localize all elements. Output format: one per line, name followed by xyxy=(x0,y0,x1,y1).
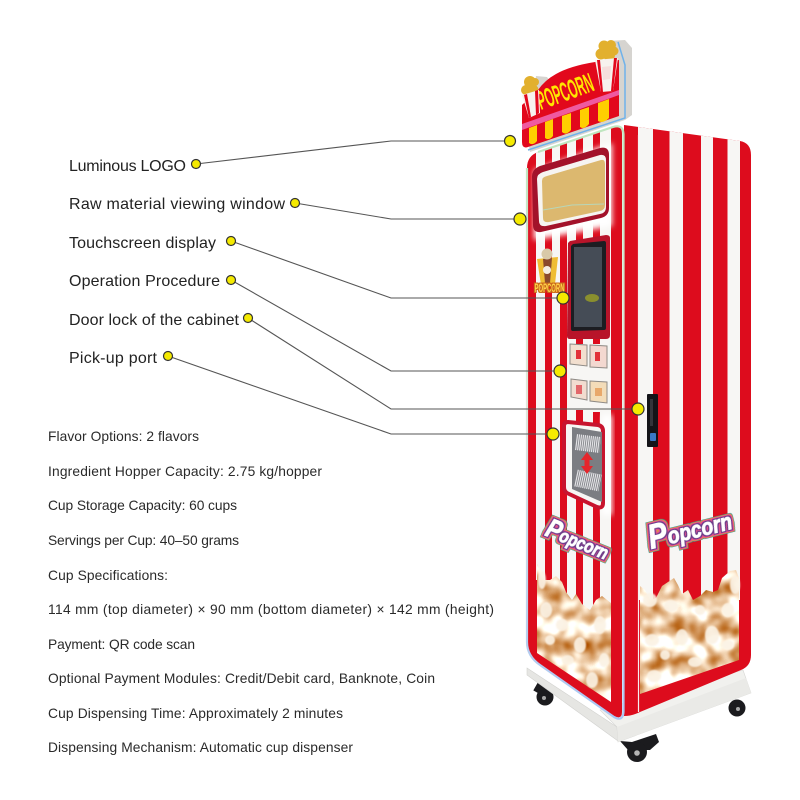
operation procedure panel xyxy=(567,339,610,421)
left popcorn cup xyxy=(521,76,540,118)
vending machine: POPCORN xyxy=(534,281,564,295)
luminous popcorn sign xyxy=(521,40,632,152)
leader line: touchscreen xyxy=(226,236,569,304)
specifications list: Ingredient Hopper Capacity: 2.75 kg/hopper xyxy=(48,464,322,479)
specifications list: Cup Dispensing Time: Approximately 2 minutes xyxy=(48,706,343,721)
caster wheels xyxy=(533,682,746,762)
component labels: Door lock of the cabinet xyxy=(69,312,240,329)
white base platform xyxy=(527,668,751,742)
blue rim light xyxy=(528,42,625,150)
component labels: Operation Procedure xyxy=(69,273,220,290)
ambient LED trim xyxy=(527,126,624,719)
specifications list: Cup Storage Capacity: 60 cups xyxy=(48,498,237,513)
component labels: Raw material viewing window xyxy=(69,196,285,213)
sign face xyxy=(522,60,619,147)
specifications list: Cup Specifications: xyxy=(48,568,168,583)
popcorn script logo, side: Popcorn xyxy=(644,499,735,557)
right popcorn cup xyxy=(595,40,618,92)
specifications list: 114 mm (top diameter) × 90 mm (bottom diameter) × 142 mm (height) xyxy=(48,602,494,617)
dispensing vents xyxy=(576,442,600,483)
component labels: Touchscreen display xyxy=(69,235,216,252)
front popcorn artwork xyxy=(537,564,611,702)
red arrow icon xyxy=(581,452,593,474)
component labels: Pick-up port xyxy=(69,350,158,367)
cabinet side panel xyxy=(623,120,753,720)
raw material viewing window xyxy=(532,148,609,232)
side popcorn artwork xyxy=(640,570,739,694)
specifications list xyxy=(48,429,494,755)
glow behind the window xyxy=(534,143,612,240)
small popcorn logo xyxy=(534,248,564,295)
specifications list: Optional Payment Modules: Credit/Debit card, Banknote, Coin xyxy=(48,671,435,686)
sign extrusion xyxy=(528,40,632,152)
corner edge highlight xyxy=(638,135,640,712)
specifications list: Payment: QR code scan xyxy=(48,637,195,652)
specifications list: Flavor Options: 2 flavors xyxy=(48,429,199,444)
specifications list: Dispensing Mechanism: Automatic cup dispenser xyxy=(48,740,353,755)
touchscreen display xyxy=(567,235,610,339)
leader line: door lock xyxy=(244,314,644,415)
cabinet front panel xyxy=(525,120,625,720)
vending machine xyxy=(521,40,753,762)
component labels xyxy=(69,158,285,367)
door lock xyxy=(647,394,658,447)
awning pink band xyxy=(522,90,619,130)
popcorn script logo, front: Popcorn xyxy=(542,513,614,565)
leader line: luminous logo xyxy=(192,136,516,168)
awning yellow stripes xyxy=(529,99,609,144)
leader line: operation procedure xyxy=(226,276,566,377)
luminous popcorn sign: POPCORN xyxy=(533,68,598,116)
procedure cards xyxy=(570,344,607,403)
pick-up port xyxy=(564,415,612,515)
component labels: Luminous LOGO xyxy=(69,158,186,175)
leader line: pick-up port xyxy=(164,352,559,440)
specifications list: Servings per Cup: 40–50 grams xyxy=(48,533,239,548)
leader line: viewing window xyxy=(290,198,526,225)
